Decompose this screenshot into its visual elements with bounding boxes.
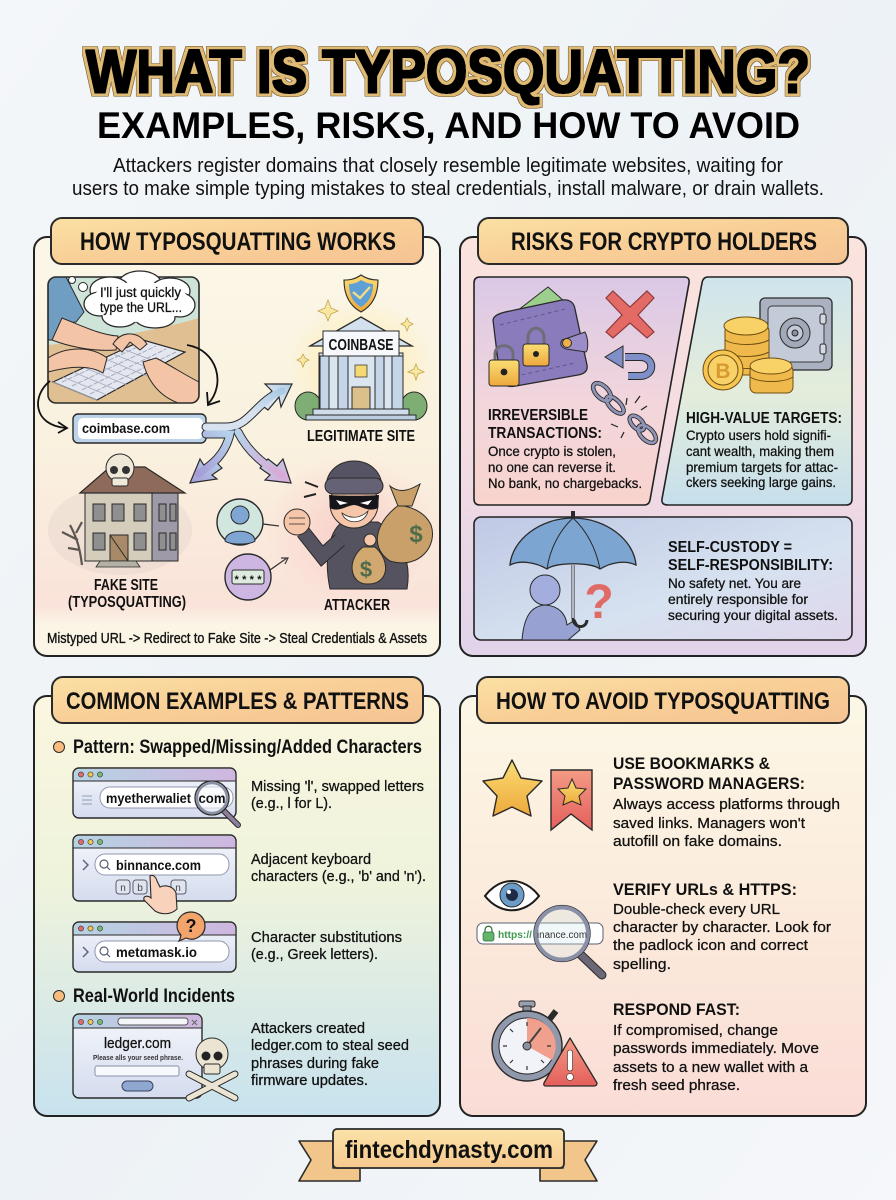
description: substitutions: Character substitutions xyxy=(251,929,402,946)
description: adjacent keys: Adjacent keyboard xyxy=(251,851,371,868)
icon: skull and crossbones xyxy=(189,1038,235,1098)
icon: umbrella and person xyxy=(510,511,636,640)
subheading: real-world incidents: Real-World Incidents xyxy=(73,986,235,1007)
text: verify urls: VERIFY URLs & HTTPS: xyxy=(613,880,797,899)
footer ribbon: fintechdynasty.com: fintechdynasty.com xyxy=(345,1136,553,1164)
intro text: Attackers register domains that closely resemble legitimate websites, waiting for xyxy=(113,154,783,177)
description: adjacent keys: characters (e.g., 'b' and 'n'). xyxy=(251,868,426,885)
text: irreversible transactions: Once crypto is stolen, xyxy=(488,443,616,459)
icon: question bubble: ? xyxy=(186,916,196,936)
text: high-value targets: premium targets for attac- xyxy=(686,459,838,475)
label: legitimate site: LEGITIMATE SITE xyxy=(307,428,415,445)
description: substitutions: (e.g., Greek letters). xyxy=(251,946,378,963)
icon: gold coins: B xyxy=(715,360,731,383)
icon: magnifier xyxy=(195,781,238,825)
icon: verified shield xyxy=(344,275,378,312)
heading: how to avoid typosquatting: HOW TO AVOID TYPOSQUATTING xyxy=(496,688,830,715)
browser: fake ledger site: Please alls your seed phrase. xyxy=(93,1053,183,1062)
thought bubble xyxy=(68,271,195,328)
arrows: forking paths from url bar xyxy=(190,384,292,483)
icon: broken chain xyxy=(590,380,659,446)
arrow: keyboard to url bar xyxy=(38,345,220,433)
text: verify urls: Double-check every URL xyxy=(613,901,780,918)
text: irreversible transactions: IRREVERSIBLE xyxy=(488,407,588,424)
icon: red x xyxy=(606,291,654,338)
caption: attack flow: Mistyped URL -> Redirect to Fake Site -> Steal Credentials & Assets xyxy=(47,631,427,647)
panel: how to avoid typosquatting xyxy=(460,677,866,1116)
browser: metamask: metɑmask.io xyxy=(116,944,197,960)
intro text: users to make simple typing mistakes to steal credentials, install malware, or drain wallets. xyxy=(72,177,824,200)
text: verify urls xyxy=(613,880,831,973)
icon: question bubble xyxy=(177,912,205,941)
card: self-custody xyxy=(474,511,852,640)
icon: safe xyxy=(760,298,832,370)
label: fake site xyxy=(68,577,186,611)
browser: binnance: n xyxy=(175,883,181,894)
icon: https url bar with magnifier xyxy=(477,906,603,975)
text: bookmarks and password managers: PASSWORD MANAGERS: xyxy=(613,774,805,793)
text: high-value targets xyxy=(686,410,842,490)
text: irreversible transactions: no one can reverse it. xyxy=(488,459,616,475)
icon: skull on roof xyxy=(106,454,134,486)
subheading: patterns: Pattern: Swapped/Missing/Added Characters xyxy=(73,737,422,758)
text: irreversible transactions: No bank, no chargebacks. xyxy=(488,475,642,491)
description: ledger incident: phrases during fake xyxy=(251,1055,379,1072)
text: self-custody: SELF-CUSTODY = xyxy=(668,539,792,556)
illustration: legitimate bank xyxy=(286,300,436,430)
url bar: coimbase.com: coimbase.com xyxy=(82,420,170,436)
heading: common examples and patterns xyxy=(52,677,423,723)
text: verify urls: character by character. Look for xyxy=(613,919,831,936)
description: ledger incident: firmware updates. xyxy=(251,1072,368,1089)
browser: myetherwaliet xyxy=(73,768,238,825)
heading: common examples and patterns: COMMON EXAMPLES & PATTERNS xyxy=(66,688,409,715)
illustration: typing on a keyboard xyxy=(48,277,199,403)
title: WHAT IS TYPOSQUATTING? xyxy=(86,38,810,106)
description: ledger incident: Attackers created xyxy=(251,1020,365,1037)
thought bubble: type the URL... xyxy=(100,300,182,315)
icon: user credentials xyxy=(217,499,279,545)
text: bookmarks and password managers: saved links. Managers won't xyxy=(613,815,806,832)
label: attacker: ATTACKER xyxy=(324,597,390,614)
icon: bookmark xyxy=(551,770,592,830)
card: high-value targets xyxy=(662,277,852,505)
panel: how typosquatting works xyxy=(34,218,440,656)
text: respond fast xyxy=(613,1000,819,1094)
illustration: legitimate bank: COINBASE xyxy=(328,337,394,354)
description: missing letters: (e.g., l for L). xyxy=(251,795,332,812)
text: respond fast: fresh seed phrase. xyxy=(613,1077,740,1094)
browser: binnance: binnance.com xyxy=(116,857,201,873)
icon: eye xyxy=(485,881,539,910)
browser: metamask xyxy=(73,912,236,972)
description: ledger incident: ledger.com to steal seed xyxy=(251,1037,409,1054)
icon: umbrella and person: ? xyxy=(584,576,614,629)
heading: how typosquatting works xyxy=(51,218,423,264)
panel: common examples and patterns xyxy=(34,677,440,1116)
text: respond fast: assets to a new wallet with a xyxy=(613,1059,809,1076)
icon: money bags: $ xyxy=(409,521,423,548)
footer ribbon: fintechdynasty.com xyxy=(299,1129,597,1181)
text: self-custody: securing your digital assets. xyxy=(668,607,838,623)
heading: how typosquatting works: HOW TYPOSQUATTING WORKS xyxy=(80,228,396,256)
heading: risks for crypto holders xyxy=(478,218,848,264)
browser: binnance xyxy=(73,835,236,914)
icon: https url bar with magnifier: inance.com xyxy=(537,930,587,941)
subtitle: EXAMPLES, RISKS, AND HOW TO AVOID xyxy=(97,105,800,146)
description: adjacent keys xyxy=(251,851,426,885)
browser: binnance: b xyxy=(137,883,143,894)
intro text xyxy=(72,154,824,200)
text: bookmarks and password managers: autofill on fake domains. xyxy=(613,833,782,850)
icon: https url bar with magnifier: https:// xyxy=(498,930,532,941)
browser: myetherwaliet: myetherwaliet xyxy=(106,790,191,806)
text: bookmarks and password managers xyxy=(613,754,840,850)
text: verify urls: the padlock icon and correct xyxy=(613,937,809,954)
label: fake site: (TYPOSQUATTING) xyxy=(68,594,186,611)
text: respond fast: If compromised, change xyxy=(613,1022,778,1039)
text: respond fast: passwords immediately. Move xyxy=(613,1040,819,1057)
icon: money bags xyxy=(352,484,433,584)
icon: money bags: $ xyxy=(360,557,372,582)
description: missing letters: Missing 'l', swapped letters xyxy=(251,778,424,795)
icon: stopwatch xyxy=(492,1001,562,1081)
browser: fake ledger site xyxy=(73,1014,202,1098)
icon: pointing hand xyxy=(144,875,177,914)
icon: magnifier: com xyxy=(198,790,226,806)
text: self-custody: SELF-RESPONSIBILITY: xyxy=(668,557,833,574)
text: high-value targets: HIGH-VALUE TARGETS: xyxy=(686,410,842,427)
url bar: coimbase.com xyxy=(73,414,206,443)
text: bookmarks and password managers: USE BOOKMARKS & xyxy=(613,754,770,773)
icon: password: **** xyxy=(234,574,262,586)
icon: star xyxy=(483,760,542,816)
heading: how to avoid typosquatting xyxy=(477,677,849,723)
description: ledger incident xyxy=(251,1020,409,1089)
browser: binnance: n xyxy=(120,883,126,894)
label: fake site: FAKE SITE xyxy=(94,577,158,594)
description: substitutions xyxy=(251,929,402,963)
heading: risks for crypto holders: RISKS FOR CRYPTO HOLDERS xyxy=(511,228,817,256)
icon: sparkles xyxy=(297,300,424,380)
text: high-value targets: ckers seeking large gains. xyxy=(686,474,836,490)
text: self-custody: entirely responsible for xyxy=(668,591,808,607)
text: verify urls: spelling. xyxy=(613,956,671,973)
browser: fake ledger site: ledger.com xyxy=(104,1035,171,1052)
text: self-custody xyxy=(668,539,838,623)
text: self-custody: No safety net. You are xyxy=(668,575,801,591)
panel: risks for crypto holders xyxy=(460,218,866,656)
thought bubble: I'll just quickly xyxy=(100,285,181,300)
illustration: fake house xyxy=(48,467,192,575)
card: irreversible transactions xyxy=(474,277,689,505)
text: irreversible transactions: TRANSACTIONS: xyxy=(488,425,602,442)
text: bookmarks and password managers: Always access platforms through xyxy=(613,796,840,813)
text: irreversible transactions xyxy=(488,407,642,491)
illustration: attacker xyxy=(265,455,435,605)
icon: password xyxy=(225,554,288,600)
icon: wallet with padlocks xyxy=(489,287,588,387)
text: high-value targets: cant wealth, making them xyxy=(686,443,834,459)
text: respond fast: RESPOND FAST: xyxy=(613,1000,740,1019)
icon: gold coins xyxy=(703,317,793,393)
icon: undo arrow xyxy=(605,346,651,376)
description: missing letters xyxy=(251,778,424,812)
text: high-value targets: Crypto users hold signifi- xyxy=(686,427,831,443)
icon: warning triangle xyxy=(544,1038,597,1086)
